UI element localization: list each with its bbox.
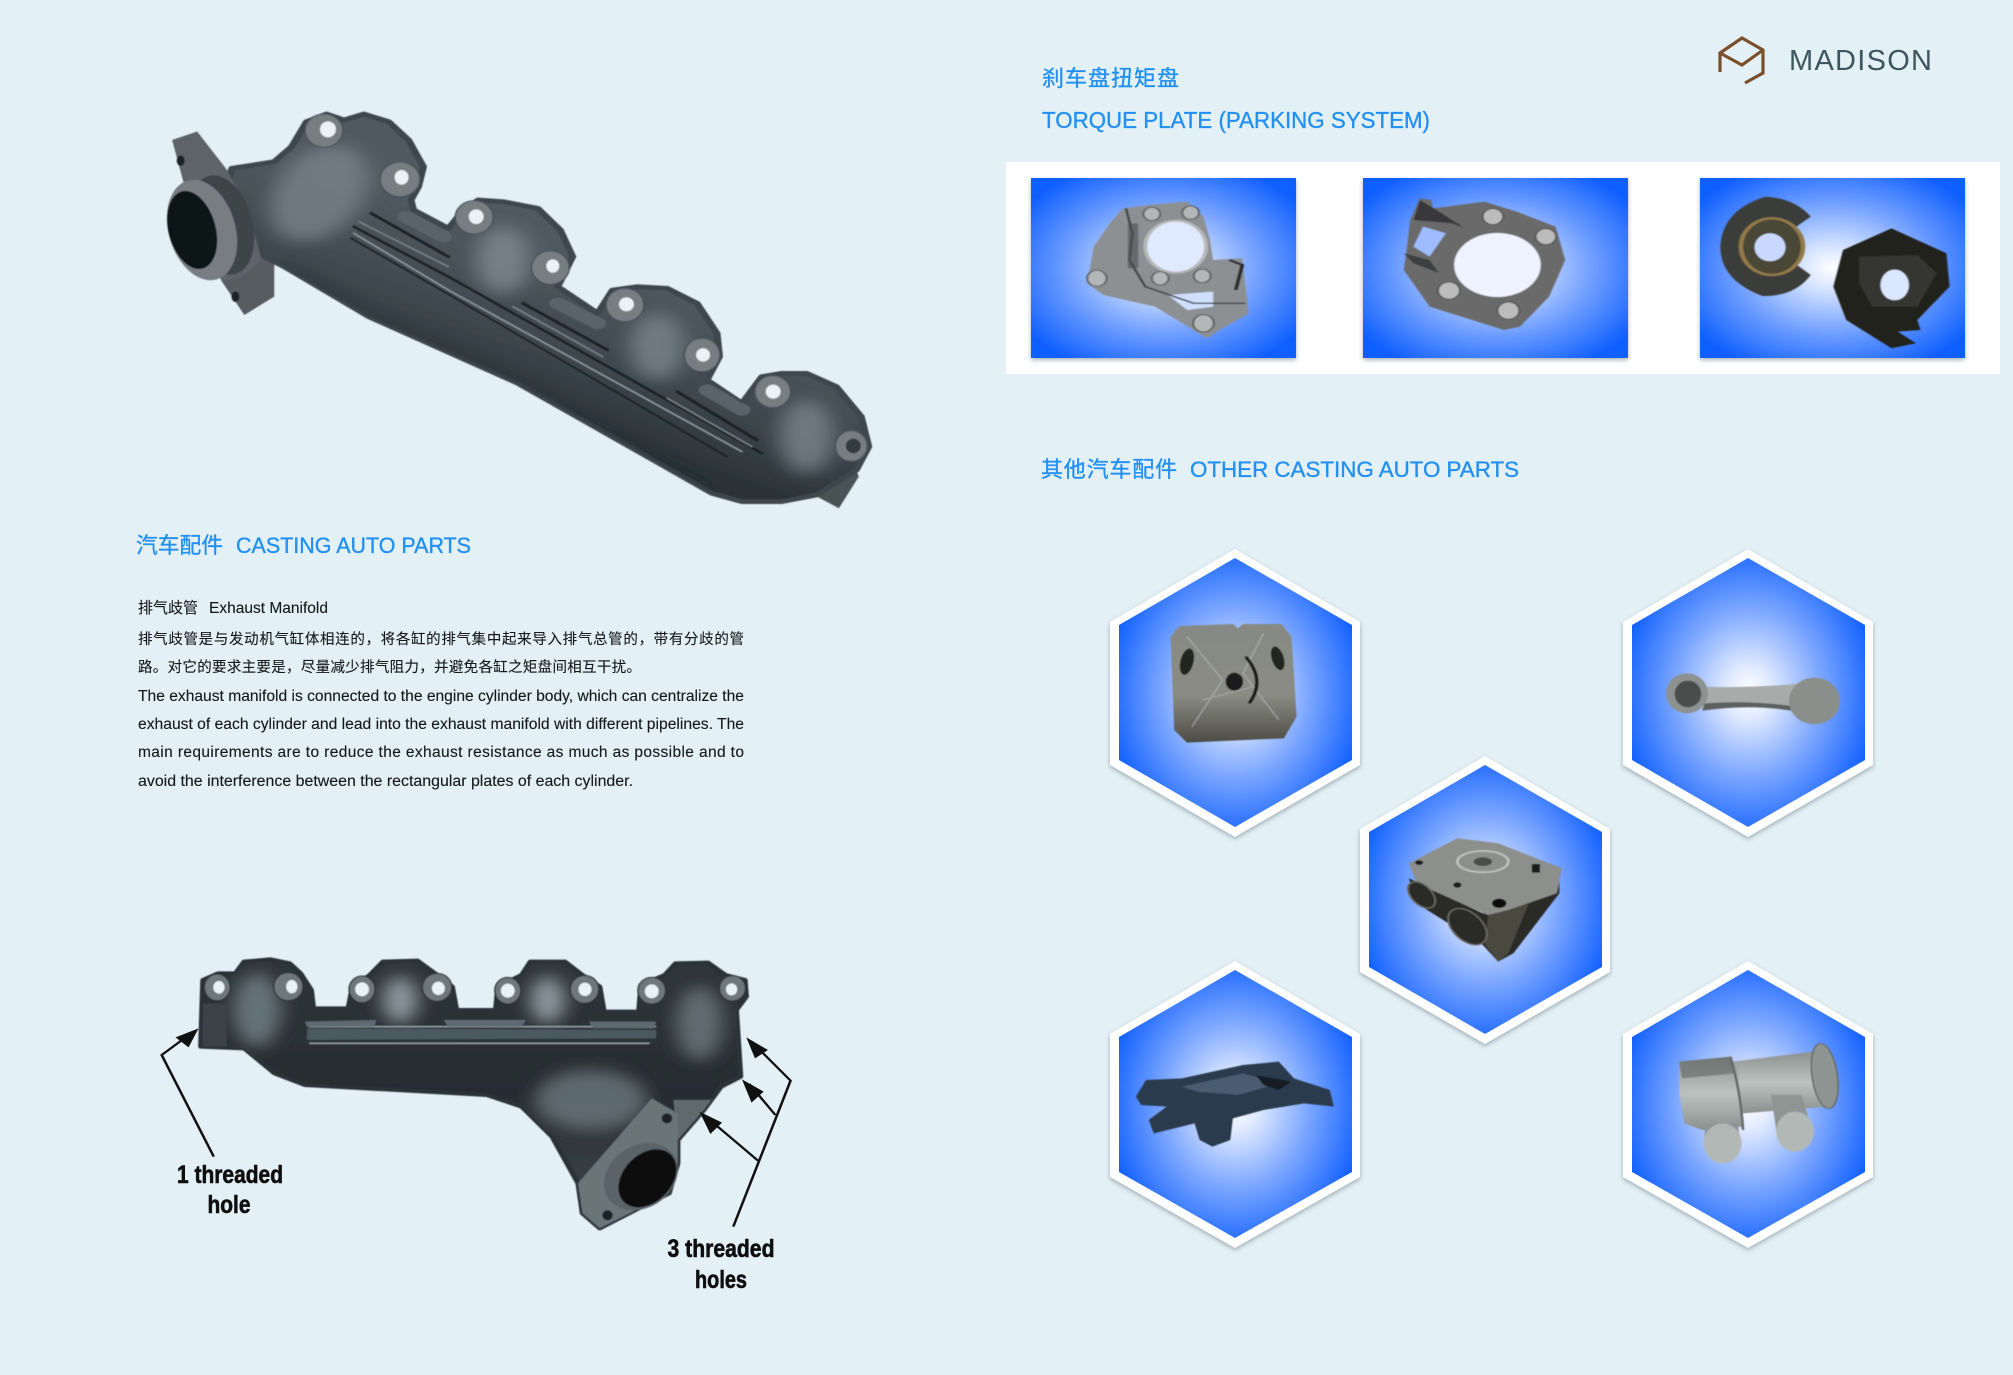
bosses <box>305 114 867 461</box>
label: 1 threaded hole <box>177 1161 283 1219</box>
photo: torque plate 1 <box>1031 178 1296 358</box>
label: 3 threaded holes: holes <box>695 1266 747 1294</box>
photo: exhaust manifold front view <box>201 959 746 1228</box>
hexagon: arm part <box>1623 549 1873 837</box>
hexagon: cylinder part <box>1623 961 1873 1248</box>
text block: exhaust manifold description: The exhaust manifold is connected to the engine cylinder body, which can centralize the <box>138 688 744 705</box>
heading: torque plate <box>1042 66 1430 133</box>
panel: torque plate photos <box>1006 162 2000 374</box>
hexagon: valve block part <box>1360 756 1610 1044</box>
text block: exhaust manifold description: 排气歧管是与发动机气缸体相连的，将各缸的排气集中起来导入排气总管的，带有分歧的管 <box>138 630 744 648</box>
arrows: 3 threaded holes <box>699 1037 791 1227</box>
wordmark: MADISON <box>1789 45 1932 77</box>
hexagon: navy frame part <box>1110 961 1360 1248</box>
label: 1 threaded hole: 1 threaded <box>177 1161 283 1189</box>
hexagon: plate part <box>1110 549 1360 837</box>
text block: exhaust manifold description: main requirements are to reduce the exhaust resistance as much as possible and to <box>138 744 744 761</box>
photo: brake backing plates <box>1700 178 1965 358</box>
heading: torque plate: TORQUE PLATE (PARKING SYSTEM) <box>1042 107 1430 133</box>
heading: other casting auto parts <box>1041 457 1519 482</box>
text block: exhaust manifold description: exhaust of each cylinder and lead into the exhaust manifold with different pipelines. The <box>138 716 744 733</box>
flange ring <box>172 132 262 282</box>
icon: hexagon M mark <box>1720 38 1763 83</box>
heading: casting auto parts: 汽车配件 <box>136 533 223 558</box>
outlet flange <box>578 1098 678 1228</box>
photo: exhaust manifold angled view <box>158 114 869 508</box>
heading: casting auto parts <box>136 533 471 558</box>
heading: casting auto parts: CASTING AUTO PARTS <box>236 533 471 558</box>
text block: exhaust manifold description: Exhaust Manifold <box>209 600 328 617</box>
logo: Madison <box>1720 38 1932 83</box>
text block: exhaust manifold description: 排气歧管 <box>138 599 198 617</box>
arrow: 1 threaded hole <box>162 1028 214 1157</box>
label: 3 threaded holes: 3 threaded <box>668 1235 774 1263</box>
heading: other casting auto parts: 其他汽车配件 <box>1041 457 1177 482</box>
text block: exhaust manifold description: avoid the interference between the rectangular plates of each cylinder. <box>138 773 633 790</box>
heading: torque plate: 刹车盘扭矩盘 <box>1042 66 1179 91</box>
heading: other casting auto parts: OTHER CASTING AUTO PARTS <box>1190 457 1519 482</box>
label: 1 threaded hole: hole <box>208 1191 251 1219</box>
text block: exhaust manifold description <box>138 599 744 790</box>
photo: torque plate 2 <box>1363 178 1628 358</box>
text block: exhaust manifold description: 路。对它的要求主要是，尽量减少排气阻力，并避免各缸之矩盘间相互干扰。 <box>138 658 641 676</box>
label: 3 threaded holes <box>668 1235 774 1294</box>
